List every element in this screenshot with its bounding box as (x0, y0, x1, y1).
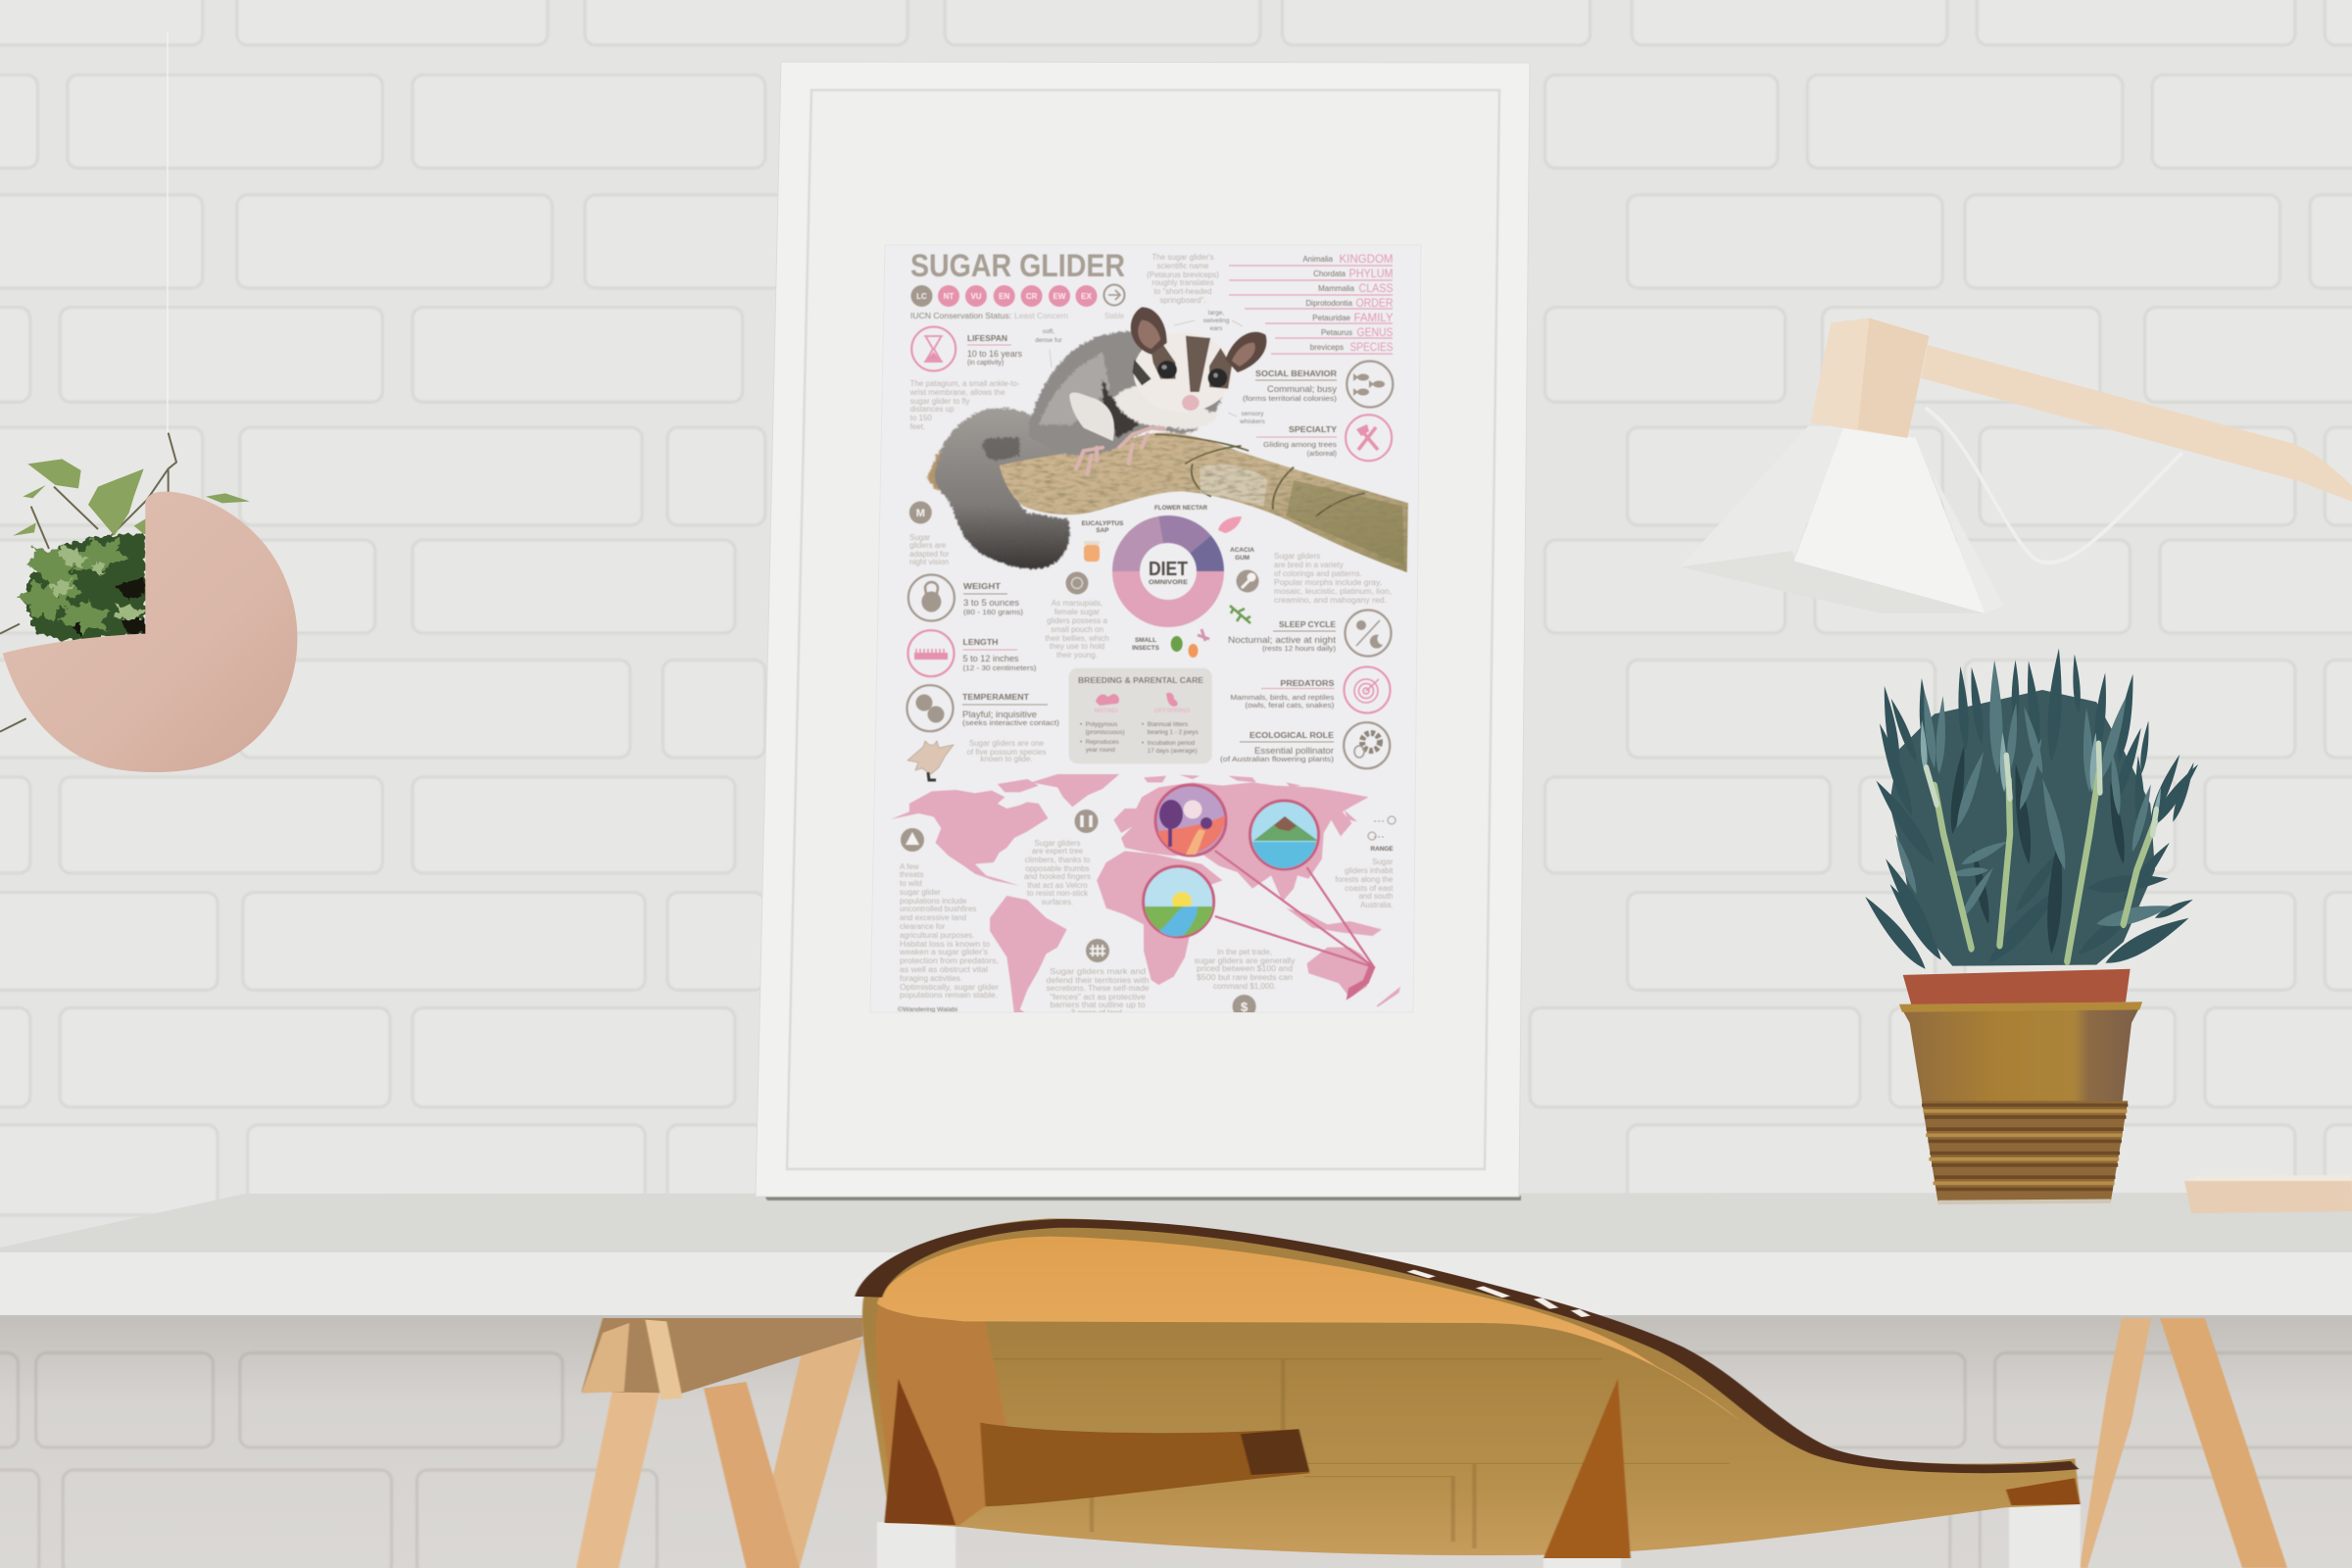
icon: fence badge (1086, 939, 1109, 962)
mating column: Polygynous (1086, 721, 1117, 728)
range text: Australia. (1360, 901, 1394, 909)
icon: kettlebell (908, 574, 955, 621)
head (1133, 332, 1233, 413)
range text (1335, 858, 1394, 909)
scientific name text: The sugar glider's (1152, 253, 1214, 262)
icon: night vision badge (909, 502, 932, 523)
sleep cycle block (1228, 610, 1392, 657)
threats text: populations include (900, 897, 967, 906)
weight block (908, 574, 1023, 621)
temperament block: Playful; inquisitive (962, 710, 1037, 719)
specialty block: SPECIALTY (1289, 424, 1337, 434)
whiskers callout (1228, 412, 1265, 423)
weight block: (80 - 160 grams) (963, 610, 1023, 616)
patagium text: distances up (910, 405, 955, 414)
threats text: weaken a sugar glider's (899, 948, 988, 956)
chair (862, 1218, 2081, 1568)
patagium text: sugar glider to fly (910, 397, 970, 406)
climbing text: that act as Velcro (1027, 881, 1088, 890)
ears (1131, 307, 1266, 372)
lamp cable (1926, 408, 2181, 563)
icon: range route (1368, 816, 1396, 840)
marsupial pouch text: As marsupials, (1052, 599, 1102, 608)
IUCN status row: NT (944, 292, 954, 301)
lifespan block: (in captivity) (967, 360, 1004, 367)
scientific name text: to "short-headed (1154, 287, 1211, 296)
climbing text (1024, 839, 1091, 906)
icon: fish group (1347, 361, 1393, 408)
patagium text: feet. (910, 422, 925, 431)
habitat circle: island mountain (1250, 801, 1319, 869)
icon: offspring (1166, 693, 1178, 707)
brick reflection lines (986, 1359, 1730, 1548)
temperament block: (seeks interactive contact) (962, 720, 1059, 727)
range text: and south (1358, 892, 1394, 901)
taxonomy list: PHYLUM (1348, 267, 1394, 280)
eastern australia range (1347, 963, 1376, 1001)
conservation status: Least Concern (1014, 312, 1068, 320)
scientific name text: scientific name (1157, 262, 1209, 270)
diet labels: INSECTS (1132, 645, 1160, 652)
panel: breeding and parental care: BREEDING & PARENTAL CARE (1078, 676, 1204, 685)
temperament block: TEMPERAMENT (962, 692, 1030, 702)
icon: claws badge (1074, 809, 1098, 833)
desk front edge (0, 1252, 2352, 1316)
world map (891, 774, 1400, 1014)
pet trade text: In the pet trade, (1217, 948, 1272, 956)
planter thread (166, 32, 170, 434)
night vision text: night vision (909, 558, 949, 566)
territory text: barriers that outline up to (1051, 1001, 1146, 1009)
whiskers callout: whiskers (1239, 418, 1266, 425)
range section (1335, 816, 1396, 909)
night vision text: gliders are (909, 541, 947, 550)
threats text: as well as obstruct vital (900, 965, 988, 974)
icon: ecosystem gear (1344, 722, 1390, 768)
length block (907, 630, 1037, 676)
ecological role block: ECOLOGICAL ROLE (1250, 730, 1334, 740)
social behavior block: Communal; busy (1267, 384, 1338, 394)
diet labels: SMALL (1135, 637, 1156, 644)
climbing text: climbers, thanks to (1025, 856, 1091, 864)
icon: ruler (907, 630, 955, 676)
marsupial pouch text: their young. (1056, 651, 1098, 660)
territory text (1047, 967, 1150, 1017)
patagium text: to 150 (910, 414, 932, 422)
diet donut chart (1108, 512, 1228, 631)
range section: RANGE (1370, 846, 1394, 853)
poster sheet (870, 245, 1421, 1012)
whiskers callout: sensory (1241, 411, 1264, 417)
threats text: populations remain stable. (900, 991, 998, 1000)
copyright: ©Wandering Walabi (898, 1005, 957, 1013)
mating column (1080, 708, 1125, 754)
hanging planter with ivy (0, 32, 297, 772)
paws (1076, 428, 1164, 473)
taxonomy list: CLASS (1358, 281, 1394, 295)
range text: gliders inhabit (1345, 866, 1394, 875)
icon: eucalyptus leaves (1230, 606, 1250, 623)
specialty block: Gliding among trees (1263, 442, 1338, 449)
marsupial pouch text (1045, 599, 1109, 660)
diet labels: FLOWER NECTAR (1154, 505, 1207, 512)
length block: 5 to 12 inches (962, 654, 1019, 663)
taxonomy list (1229, 252, 1394, 354)
title: SUGAR GLIDER (910, 248, 1125, 283)
taxonomy list: GENUS (1356, 325, 1394, 339)
IUCN status row: CR (1026, 292, 1038, 301)
desk top surface (0, 1193, 2352, 1253)
threats text: threats (900, 870, 923, 879)
offspring column: Biannual litters (1148, 721, 1188, 728)
mating column: (promiscuous) (1086, 729, 1125, 736)
patagium text: wrist membrane, allows the (909, 388, 1005, 397)
range text: Sugar (1372, 858, 1394, 866)
scientific name text: springboard". (1159, 296, 1206, 305)
climbing text: are expert tree (1032, 847, 1084, 856)
offspring column: • (1142, 721, 1144, 728)
marsupial pouch text: female sugar (1054, 608, 1100, 616)
icon: target (1345, 666, 1390, 713)
conservation status (910, 312, 1124, 319)
soft fur callout (1035, 328, 1063, 368)
icon: night vision badge: M (916, 508, 925, 519)
threats text: clearance for (900, 922, 946, 931)
frame inner mat (787, 90, 1499, 1169)
scientific name text (1147, 253, 1219, 305)
territory text: secretions. These self-made (1047, 984, 1150, 993)
length block: (12 - 30 centimeters) (962, 665, 1037, 672)
taxonomy list: KINGDOM (1339, 252, 1394, 266)
soft fur callout: soft, (1043, 328, 1054, 335)
climbing text: to resist non-stick (1027, 889, 1089, 898)
specialty block (1256, 415, 1392, 461)
threats text: to wild (900, 879, 922, 888)
marsupial pouch text: small pouch on (1051, 625, 1103, 634)
IUCN status row: LC (916, 292, 927, 301)
offspring column: 17 days (average) (1148, 748, 1198, 755)
ears callout (1174, 310, 1243, 332)
soft fur callout: dense fur (1035, 337, 1063, 344)
threats text: foraging activities. (900, 974, 962, 983)
range text: forests along the (1335, 875, 1394, 884)
foliage (1861, 648, 2202, 975)
diet labels (1082, 505, 1254, 652)
icon: faces (907, 685, 953, 731)
chest fur (1113, 386, 1219, 429)
length block: LENGTH (962, 637, 998, 647)
icon: honey jar (1084, 541, 1100, 562)
weight block: WEIGHT (963, 581, 1002, 591)
wing flap (1069, 392, 1114, 441)
ecological role block: (of Australian flowering plants) (1220, 757, 1334, 763)
icon: mating (1096, 694, 1119, 706)
right sawhorse desk leg (2080, 1318, 2151, 1568)
threats section (899, 828, 999, 1000)
photo: sugar glider on branch (927, 307, 1408, 572)
left sawhorse desk leg (576, 1318, 863, 1568)
conservation status: Stable (1104, 312, 1124, 320)
taxonomy list: Diprotodontia (1305, 299, 1353, 308)
picture frame (756, 62, 1530, 1200)
mating column: year round (1086, 747, 1115, 754)
taxonomy list: FAMILY (1354, 311, 1394, 324)
offspring column: Incubation period (1148, 740, 1196, 747)
climbing section (1024, 809, 1098, 906)
diet labels: GUM (1235, 555, 1250, 562)
climbing text: surfaces. (1042, 898, 1073, 906)
planter bowl (3, 492, 297, 772)
coloration text: of colorings and patterns. (1274, 569, 1362, 578)
taxonomy list: Petaurus (1321, 328, 1352, 337)
offspring column (1142, 708, 1199, 755)
infographic poster (891, 248, 1408, 1018)
pet trade text: priced between $100 and (1197, 964, 1293, 973)
territory text: defend their territories with (1047, 976, 1149, 985)
icon: acacia gum badge (1237, 570, 1258, 592)
diet donut chart: DIET (1149, 559, 1188, 580)
pet trade text: sugar gliders are generally (1194, 956, 1296, 965)
threats text: and excessive land (900, 913, 966, 922)
glide species text: of five possum species (967, 748, 1046, 757)
coloration text: Sugar gliders (1274, 552, 1320, 561)
taxonomy list: ORDER (1356, 296, 1394, 310)
diet labels: EUCALYPTUS (1082, 520, 1124, 527)
icon: hourglass (911, 327, 956, 370)
mating column: • (1080, 739, 1082, 746)
taxonomy list: SPECIES (1350, 340, 1394, 354)
ecological role block: Essential pollinator (1254, 746, 1334, 756)
branch (1000, 432, 1408, 572)
glide species text: Sugar gliders are one (969, 739, 1045, 748)
offspring column: • (1142, 740, 1144, 747)
social behavior block: SOCIAL BEHAVIOR (1255, 368, 1338, 378)
branch stub (925, 450, 942, 492)
patagium text (909, 379, 1020, 431)
lamp arm (1921, 345, 2352, 502)
lifespan block: 10 to 16 years (967, 349, 1022, 359)
IUCN status row: EX (1081, 292, 1092, 301)
threats text: protection from predators, (900, 956, 999, 965)
range text: coasts of east (1345, 884, 1394, 893)
threats text: Optimistically, sugar glider (900, 983, 999, 992)
pet trade section (1194, 948, 1296, 1018)
taxonomy list: Animalia (1302, 255, 1334, 264)
territory text: "fences" act as protective (1050, 993, 1147, 1002)
IUCN status row: EN (999, 292, 1009, 301)
conservation status: IUCN Conservation Status: (910, 312, 1011, 320)
diet donut chart: OMNIVORE (1149, 579, 1189, 586)
climbing text: and hooked fingers (1024, 872, 1091, 881)
territory text: 3 acres of land. (1071, 1008, 1124, 1017)
habitat circle: forest sunset (1155, 785, 1226, 856)
icon: pouch badge (1066, 572, 1088, 594)
patagium text: The patagium, a small ankle-to- (910, 379, 1020, 388)
icon: sun and moon (1345, 610, 1392, 657)
glide species text (967, 739, 1046, 763)
range connector lines (1215, 851, 1374, 967)
ears callout: ears (1210, 325, 1223, 332)
icon: hammer (1346, 415, 1392, 461)
night vision text: adapted for (909, 550, 950, 559)
diet labels: ACACIA (1230, 547, 1254, 554)
wooden book on desk (2184, 1175, 2352, 1213)
climbing text: Sugar gliders (1034, 839, 1081, 848)
coloration text: creamino, and mahogany red. (1274, 596, 1387, 605)
ecological role block (1220, 722, 1390, 768)
nursery pot rim (1903, 969, 2131, 1006)
ivy foliage (0, 433, 250, 732)
frame shadow (764, 1196, 1521, 1200)
succulent plant (1861, 648, 2202, 1202)
icon: dollar badge: $ (1241, 1000, 1249, 1014)
IUCN status row (911, 284, 1125, 307)
IUCN status row: EW (1054, 292, 1066, 301)
lifespan block: LIFESPAN (967, 333, 1007, 343)
tail (935, 408, 1069, 568)
rim highlight (868, 1223, 2075, 1469)
taxonomy list: breviceps (1310, 343, 1344, 352)
social behavior block: (forms territorial colonies) (1243, 396, 1337, 403)
brass tin pot (1899, 1002, 2142, 1202)
desk lamp (1680, 318, 2352, 613)
climbing text: opposable thumbs (1025, 864, 1090, 873)
taxonomy list: Chordata (1313, 270, 1347, 278)
sleep cycle block: Nocturnal; active at night (1228, 635, 1337, 645)
habitat circle: river sunrise (1144, 866, 1214, 937)
lamp shade (1680, 424, 2004, 613)
mating column: Reproduces (1086, 739, 1119, 746)
lifespan block (911, 327, 1022, 370)
coloration text: Popular morphs include gray, (1274, 578, 1382, 587)
far right sawhorse leg (2160, 1318, 2287, 1568)
social behavior block (1243, 361, 1393, 408)
night vision text: Sugar (909, 533, 931, 542)
shell (862, 1218, 2081, 1555)
desk (0, 1193, 2352, 1317)
icon: warning badge (901, 828, 924, 852)
scientific name text: roughly translates (1152, 278, 1214, 287)
specialty block: (arboreal) (1307, 451, 1337, 458)
pet trade text: command $1,000. (1213, 982, 1276, 991)
marsupial pouch text: they use to hold (1050, 642, 1104, 651)
IUCN status row: VU (970, 292, 982, 301)
panel: breeding and parental care (1068, 668, 1212, 763)
icon: insects (1171, 629, 1209, 658)
marsupial pouch text: gliders possess a (1047, 616, 1107, 625)
predators block (1230, 666, 1390, 713)
ears callout: swiveling (1203, 318, 1230, 324)
coloration text (1274, 552, 1392, 605)
night vision text (909, 533, 950, 566)
back legs (884, 1379, 956, 1525)
ears callout: large, (1208, 310, 1224, 317)
sleep cycle block: (rests 12 hours daily) (1262, 646, 1336, 653)
upper amber reflection (877, 1237, 1740, 1421)
weight block: 3 to 5 ounces (963, 598, 1020, 608)
taxonomy list: Petauridae (1312, 314, 1351, 322)
lamp wooden head (1811, 318, 1929, 438)
icon: flower (1218, 516, 1242, 533)
pet trade text: $500 but rare breeds can (1197, 973, 1293, 982)
body (1029, 331, 1222, 456)
territory text: Sugar gliders mark and (1050, 967, 1146, 976)
threats text: sugar glider (900, 888, 941, 897)
pet trade text (1194, 948, 1296, 991)
marsupial pouch text: their bellies, which (1045, 634, 1109, 643)
sleep cycle block: SLEEP CYCLE (1279, 619, 1336, 629)
white feet (877, 1504, 2081, 1568)
diet labels: SAP (1096, 527, 1109, 534)
threats text: A few (900, 862, 919, 871)
coloration text: are bred in a variety (1274, 561, 1344, 569)
threats text (899, 862, 999, 1000)
offspring column: bearing 1 - 2 joeys (1148, 729, 1199, 736)
side strip (875, 1303, 1006, 1526)
mating column: MATING (1095, 708, 1118, 714)
threats text: agricultural purposes. (900, 931, 974, 940)
scientific name text: (Petaurus breviceps) (1147, 270, 1219, 279)
predators block: (owls, feral cats, snakes) (1245, 703, 1334, 710)
predators block: Mammals, birds, and reptiles (1230, 695, 1335, 702)
threats text: Habitat loss is known to (900, 940, 991, 949)
threats text: uncontrolled bushfires (900, 905, 976, 913)
icon: gliding silhouette (907, 741, 954, 780)
glide species text: known to glide. (980, 755, 1033, 763)
frame outer (756, 62, 1530, 1197)
armrest (980, 1423, 1309, 1506)
coloration text: mosaic, leucistic, platinum, lion, (1274, 587, 1392, 596)
temperament block (907, 685, 1059, 731)
taxonomy list: Mammalia (1318, 284, 1355, 293)
territory section (1047, 939, 1150, 1017)
mating column: • (1080, 721, 1082, 728)
predators block: PREDATORS (1280, 678, 1335, 688)
offspring column: OFFSPRING (1154, 708, 1190, 714)
